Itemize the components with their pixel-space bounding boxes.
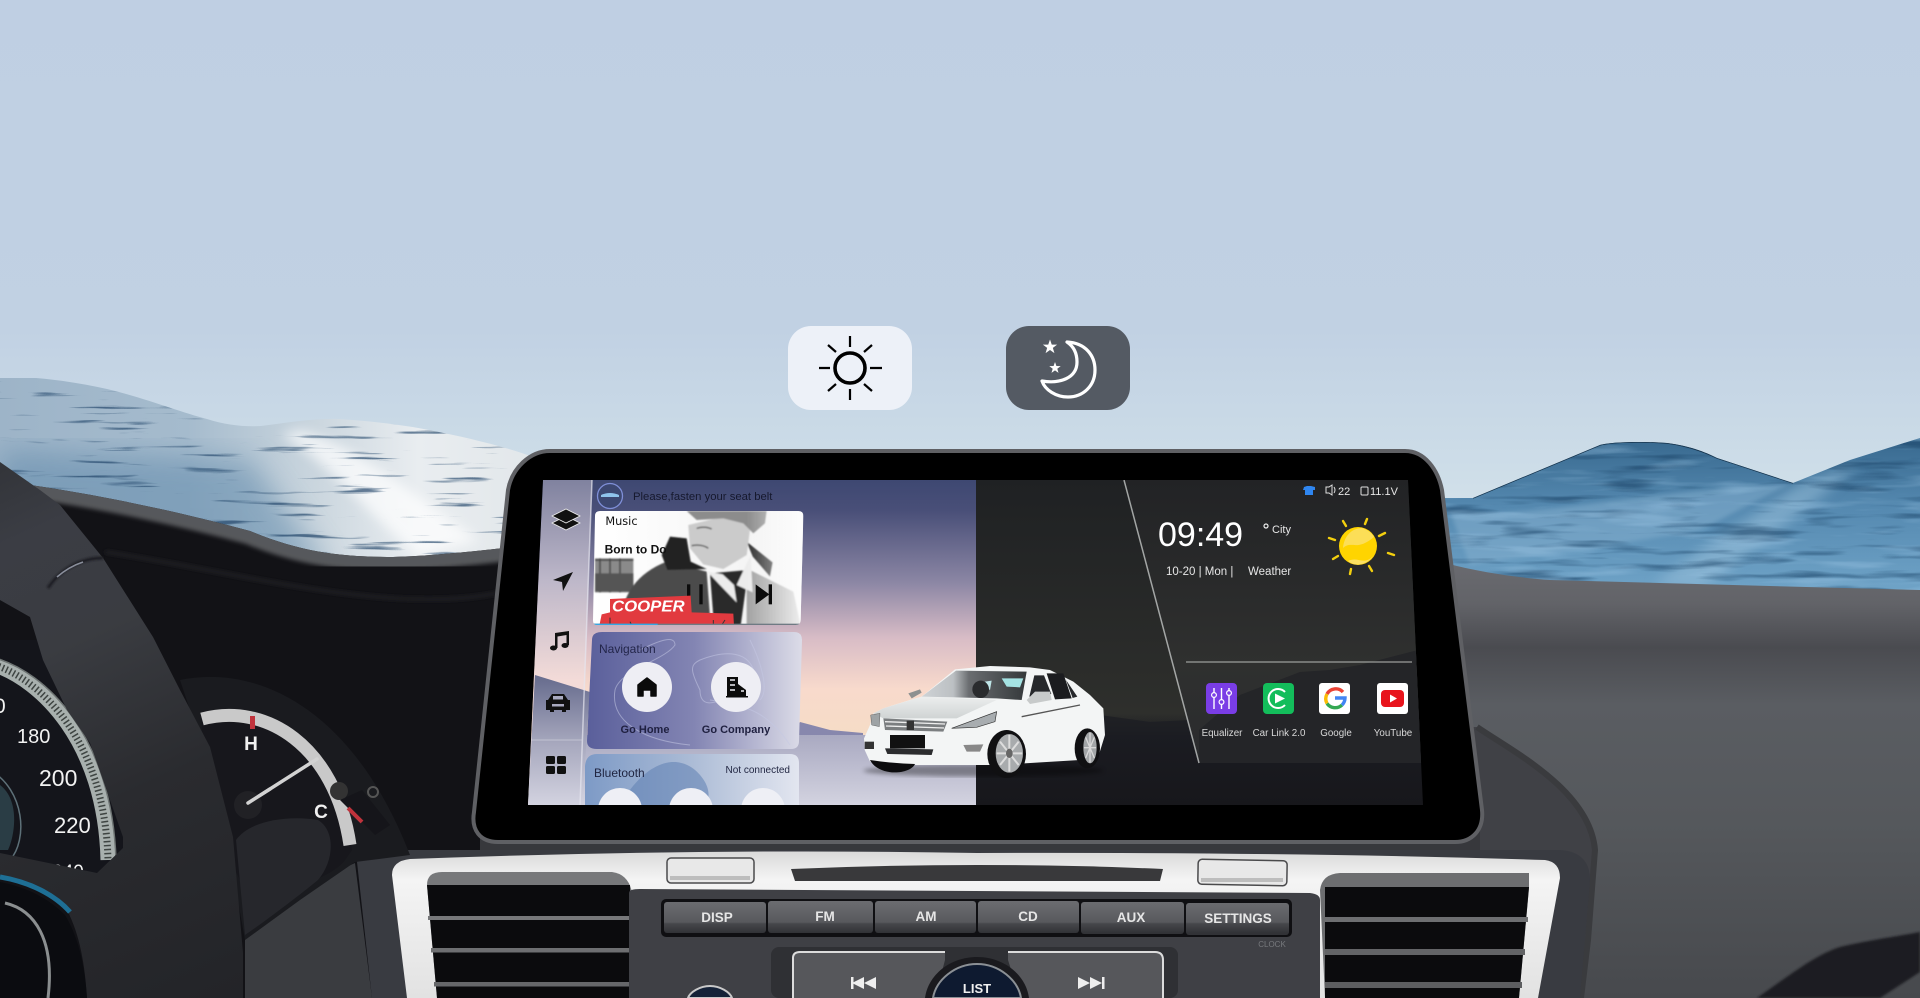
go home button: Go Home <box>621 724 669 736</box>
text: navigation heading: Navigation <box>599 642 656 656</box>
bezel <box>473 451 1482 842</box>
light theme half <box>520 480 976 832</box>
radio buttons: AUX <box>1117 910 1145 925</box>
dashboard: right side <box>1440 562 1920 998</box>
silver trim <box>392 851 1560 998</box>
head unit <box>473 451 1482 842</box>
screen <box>520 480 1426 832</box>
instrument hood <box>180 677 410 940</box>
go home button <box>621 662 672 736</box>
temperature gauge: C <box>314 802 328 823</box>
speedometer: 240 <box>52 862 84 883</box>
app: Equalizer <box>1202 683 1243 739</box>
seat belt reminder: Please,fasten your seat belt <box>633 491 773 503</box>
seat belt reminder <box>598 484 773 508</box>
app: Equalizer: Equalizer <box>1202 728 1243 739</box>
cooper logo <box>599 596 734 626</box>
app: YouTube: YouTube <box>1374 728 1413 739</box>
icon: music note <box>550 631 569 650</box>
pause button <box>687 584 703 604</box>
console face <box>629 889 1320 998</box>
weather label: Weather <box>1248 566 1291 578</box>
album photo <box>595 511 803 626</box>
clock label: CLOCK <box>1258 940 1286 949</box>
app: Google <box>1319 683 1352 739</box>
radio buttons <box>661 899 1292 937</box>
go company button: Go Company <box>702 724 771 736</box>
next button <box>756 584 772 604</box>
radio buttons: SETTINGS <box>1204 911 1272 926</box>
clock: 09:49 <box>1158 516 1243 554</box>
dashboard: left side <box>0 486 500 998</box>
music card <box>592 511 805 626</box>
icon: layers <box>552 509 580 530</box>
icon: navigation arrow <box>553 572 573 591</box>
city: City <box>1272 524 1291 536</box>
icon: app grid <box>546 756 566 774</box>
radio buttons: AM <box>916 909 936 924</box>
radio buttons: CD <box>1018 909 1038 924</box>
sidebar <box>528 480 592 805</box>
text: Music label: Music <box>605 514 638 528</box>
rear wheel <box>1075 728 1100 768</box>
blue hills: right <box>1440 436 1920 600</box>
speedometer <box>0 658 116 870</box>
app: YouTube <box>1374 683 1413 739</box>
status bar <box>1303 485 1399 498</box>
side trim <box>1022 705 1080 717</box>
headlights <box>952 712 997 728</box>
center console <box>392 851 1560 998</box>
progress bar <box>594 624 800 625</box>
car illustration <box>863 666 1105 778</box>
status bar: 22 <box>1338 486 1350 498</box>
body <box>864 666 1105 765</box>
speedometer: 220 <box>54 813 91 838</box>
slanted highlight <box>1124 480 1199 763</box>
side windows <box>1029 675 1051 697</box>
speedometer: 180 <box>17 726 50 748</box>
weather sun icon <box>1329 519 1394 574</box>
temperature gauge <box>200 714 390 935</box>
date: 10-20 | Mon | <box>1166 566 1233 578</box>
mirror <box>1027 692 1052 704</box>
front left tire <box>870 760 915 772</box>
app: Google: Google <box>1320 728 1352 739</box>
windshield <box>922 671 1027 700</box>
left air vent <box>427 872 632 998</box>
status bar: 11.1V <box>1370 486 1399 498</box>
city <box>1264 524 1291 536</box>
radio buttons: FM <box>815 909 835 924</box>
divider <box>1186 661 1412 663</box>
right air vent <box>1320 873 1529 998</box>
app: Car Link 2.0: Car Link 2.0 <box>1253 728 1306 739</box>
text: connection status: Not connected <box>726 765 790 776</box>
steering wheel <box>0 462 243 998</box>
app: Car Link 2.0 <box>1253 683 1306 739</box>
radio buttons: DISP <box>701 910 733 925</box>
cooper logo: COOPER <box>612 599 685 616</box>
go company button <box>702 662 771 736</box>
temperature gauge: H <box>244 734 258 755</box>
plate and lower grille <box>890 735 925 748</box>
slanted info panel <box>1188 518 1421 760</box>
light mode toggle <box>788 326 912 410</box>
sky background <box>0 0 1920 600</box>
grille <box>883 718 947 732</box>
panel mountains <box>1203 651 1420 729</box>
navigation card <box>585 630 805 752</box>
bluetooth card <box>585 754 799 805</box>
console surround <box>357 850 1590 998</box>
icon: car <box>546 694 570 712</box>
text: song title: Born to Do <box>605 543 667 557</box>
front wheel <box>987 730 1026 778</box>
media controls: LIST <box>963 981 991 996</box>
textured panel left of console <box>245 863 372 998</box>
text: bluetooth heading: Bluetooth <box>594 766 645 780</box>
media controls <box>688 947 1178 998</box>
speedometer: 200 <box>39 765 77 791</box>
dark theme half <box>976 480 1426 805</box>
dark mode toggle <box>1006 326 1130 410</box>
upper silver buttons and slot <box>667 858 1287 886</box>
snowy hills: left <box>0 378 528 556</box>
dash area under the display <box>480 790 1480 860</box>
